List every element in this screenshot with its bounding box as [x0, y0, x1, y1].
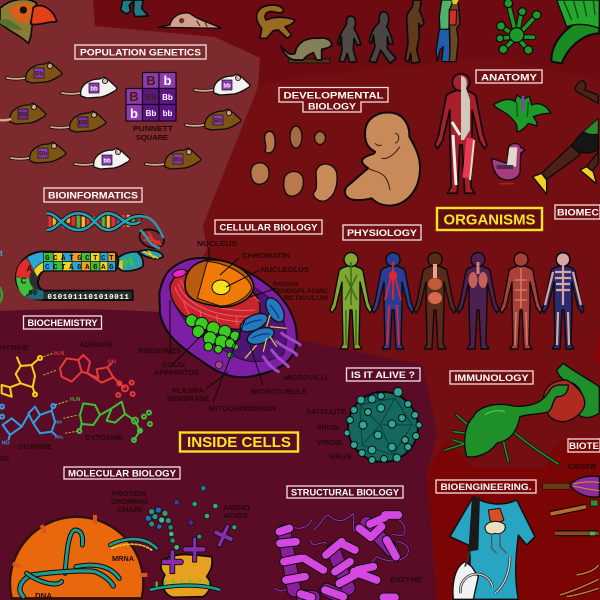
heading: developmental biology — [279, 88, 388, 112]
illustration: six physiology body systems — [330, 252, 584, 349]
illustration: animal cell cutaway — [159, 258, 300, 377]
chart: punnett square: BB — [145, 93, 157, 102]
base labels: ON — [0, 456, 9, 463]
label: enzyme: ENZYME — [390, 577, 422, 584]
chart: punnett square: Bb — [162, 93, 173, 102]
mouse brown Bb — [7, 62, 62, 83]
nucleus — [185, 260, 254, 307]
cell labels and leaders: MEMBRANE — [167, 396, 209, 403]
molecular biology labels: PROTEIN — [112, 491, 146, 498]
microvilli — [263, 333, 300, 372]
cell labels and leaders: PLASMA — [172, 388, 204, 395]
chart: punnett square — [126, 72, 176, 121]
icon: finch head — [0, 0, 57, 43]
heading: structural biology: STRUCTURAL BIOLOGY — [291, 488, 399, 498]
mouse brown BB second — [51, 111, 106, 132]
illustration: DNA helix unravelling to sequence and binary: A — [27, 265, 33, 274]
text fragment: left edge teal letter: t — [0, 249, 3, 258]
golgi apparatus — [186, 315, 240, 353]
heading: anatomy: ANATOMY — [481, 72, 537, 82]
cell labels and leaders: GOLGI — [162, 362, 185, 369]
illustrations: embryo stages — [251, 113, 420, 206]
cell labels and leaders: CHROMATIN — [242, 253, 290, 260]
label: crispr: CRISPR — [568, 464, 596, 471]
molecular biology labels — [111, 491, 251, 520]
nucleus labels: DNA — [35, 593, 52, 600]
mouse white bb: bb — [90, 86, 98, 92]
illustration: DNA helix unravelling to sequence and binary: C — [21, 276, 27, 285]
body: lymphatic system — [330, 252, 372, 349]
mitochondria — [238, 295, 288, 348]
heading: developmental biology: DEVELOPMENTAL — [284, 90, 384, 100]
chart: punnett square: bb — [163, 109, 172, 118]
mouse brown Bb third — [11, 142, 66, 163]
heading: immunology: IMMUNOLOGY — [454, 373, 528, 383]
panel: bioengineering region — [427, 438, 600, 600]
heading: biochemistry — [24, 316, 102, 329]
illustration: macrophage engulfing pathogen — [445, 363, 599, 464]
embryo stage 1 — [265, 131, 275, 153]
heading: population genetics — [75, 45, 206, 59]
rough endoplasmic reticulum — [170, 271, 260, 329]
chart: DNA base pair chemical structure: H₂N — [70, 397, 80, 403]
illustration: DNA helix unravelling to sequence and binary — [16, 213, 167, 302]
labels: non-living entities — [306, 409, 351, 461]
label: punnett square: PUNNETT — [133, 126, 174, 133]
hydrogen bonds — [43, 353, 78, 433]
label: punnett square: SQUARE — [136, 135, 168, 142]
body: digestive system — [414, 252, 456, 349]
molecular biology labels: ACIDS — [223, 513, 248, 520]
panel: organisms region — [160, 58, 600, 600]
heading: bioinformatics: BIOINFORMATICS — [48, 190, 138, 200]
embryo stage 2 — [290, 126, 302, 148]
mouse brown Bb fourth — [146, 148, 201, 169]
labels: non-living entities: VIROID — [317, 440, 342, 447]
heading: molecular biology: MOLECULAR BIOLOGY — [68, 468, 176, 478]
cell labels and leaders: MITOCHONDRION — [209, 406, 276, 413]
shirt — [450, 497, 535, 599]
chart: punnett square: b — [164, 73, 172, 88]
illustration: nucleus with DNA and mRNA — [10, 515, 157, 598]
mice with genotype tags — [0, 62, 250, 169]
chart: punnett square: b — [130, 106, 138, 121]
embryo stage 3 — [251, 163, 269, 184]
labels: non-living entities: PRION — [317, 425, 339, 432]
cell labels and leaders: RETICULUM — [284, 296, 328, 302]
panel: edge of neighbouring red region — [593, 330, 600, 365]
labels: non-living entities: SATELLITE — [306, 409, 346, 416]
icon: left edge green arcs — [0, 287, 2, 303]
icon: modern humans — [436, 0, 460, 62]
mouse brown Bb fourth: Bb — [174, 158, 182, 164]
illustration: virus — [344, 388, 422, 464]
chart: DNA base pair chemical structure: OH — [107, 359, 116, 365]
mouse white bb second: bb — [103, 158, 111, 164]
cell labels and leaders: NUCLEOLUS — [261, 267, 309, 274]
icon: dinosaur feet — [121, 0, 148, 17]
heading: biochemistry: BIOCHEMISTRY — [28, 318, 98, 328]
label: punnett square — [133, 126, 174, 142]
ribosome — [161, 555, 212, 597]
cell labels and leaders — [138, 241, 330, 413]
heading: organisms: ORGANISMS — [444, 212, 536, 228]
icon: hominid 2 — [369, 12, 396, 63]
mouse white bb third: bb — [223, 84, 231, 90]
transfer RNAs — [161, 524, 233, 574]
base labels: CYTOSINE — [85, 435, 123, 442]
illustration: total artificial heart on patient — [450, 497, 535, 599]
labels: non-living entities: VIRUS — [329, 454, 351, 461]
panel: inside cells region — [0, 309, 437, 600]
chart: punnett square: B — [146, 73, 156, 88]
illustration: ribosome translating protein — [145, 486, 237, 597]
heading: population genetics: POPULATION GENETICS — [80, 48, 201, 58]
chart: punnett square: B — [129, 89, 139, 104]
panel: evolution region at top — [93, 0, 600, 87]
mouse brown Bb: Bb — [35, 72, 43, 78]
heading: inside cells: INSIDE CELLS — [187, 434, 291, 451]
heading: physiology — [343, 225, 421, 240]
illustration: DNA helix unravelling to sequence and binary: 00 — [28, 290, 37, 298]
cell labels and leaders: APPARATUS — [154, 370, 199, 377]
strands lower — [560, 565, 599, 597]
molecule: thymine — [2, 356, 42, 397]
icon: monkey — [257, 5, 295, 38]
heading: biotechnology (cut off): BIOTE — [569, 441, 599, 451]
illustration: flower anatomy — [493, 95, 551, 132]
icon: large carnivorous plant — [552, 0, 599, 63]
body: muscular system — [500, 252, 542, 349]
icon: fossil skull — [158, 13, 222, 28]
base labels: HYMINE — [0, 345, 29, 352]
mouse brown Bb fifth — [186, 109, 241, 130]
chart: DNA base pair chemical structure: NH — [55, 419, 62, 424]
artificial heart — [488, 508, 504, 525]
chart: DNA base pair chemical structure — [0, 351, 152, 446]
molecule: adenine — [60, 355, 135, 397]
body: respiratory system — [457, 252, 499, 349]
cell labels and leaders: MICROTUBULE — [251, 389, 307, 396]
mouse white bb third — [195, 74, 250, 95]
icon: venus flytrap — [496, 0, 541, 54]
molecular biology labels: AMINO — [223, 505, 251, 512]
cas9 — [570, 476, 599, 497]
icon: hominid 3 — [405, 0, 424, 63]
cell labels and leaders: MICROVILLI — [284, 375, 327, 382]
chart: DNA base pair chemical structure: HO — [2, 440, 10, 446]
mouse brown Bb third: Bb — [39, 152, 47, 158]
heading: physiology: PHYSIOLOGY — [347, 228, 417, 238]
mouse brown BB second: BB — [79, 120, 88, 126]
nucleus labels: MRNA — [112, 556, 134, 563]
heading: is it alive — [346, 368, 420, 381]
heading: immunology — [450, 371, 533, 384]
heading: anatomy — [476, 70, 542, 83]
illustration: enzyme protein ribbon — [275, 513, 408, 597]
illustration: sprinter biomechanics — [533, 81, 598, 194]
base labels — [0, 342, 123, 463]
strap — [468, 497, 480, 552]
base labels: GUANINE — [18, 444, 52, 451]
chart: punnett square: Bb — [146, 109, 156, 118]
cell labels and leaders: RIBOSOMES — [138, 348, 181, 355]
nucleolus — [212, 280, 230, 295]
mouse white bb second — [75, 148, 130, 169]
icon: primate on branch — [281, 38, 332, 63]
heading: biotechnology (cut off) — [568, 439, 600, 452]
illustration: DNA helix unravelling to sequence and binary: CCTAGAGAG — [45, 264, 114, 272]
embryo stage 4 — [284, 171, 303, 196]
molecular biology labels: CHAIN — [117, 507, 142, 514]
base labels: ADENINE — [79, 342, 113, 349]
illustration: CRISPR tools — [543, 476, 599, 597]
illustration: human anatomy — [435, 74, 487, 193]
heading: bioengineering: BIOENGINEERING. — [440, 482, 532, 492]
vesicles — [215, 361, 223, 369]
heading: bioinformatics — [44, 188, 142, 202]
cell labels and leaders: ENDOPLASMIC — [277, 289, 330, 295]
heading: is it alive: IS IT ALIVE ? — [351, 370, 415, 380]
chart: DNA base pair chemical structure: NH₂ — [55, 434, 64, 439]
vacuole — [172, 268, 187, 279]
illustration: bird anatomy — [492, 143, 525, 184]
mouse brown BB — [0, 103, 46, 124]
icon: hominid 1 — [337, 16, 361, 62]
illustration: DNA helix unravelling to sequence and binary: GCATGCTCT — [45, 255, 114, 263]
portable driver — [453, 562, 478, 599]
heading: biomechanics (cut off) — [555, 205, 600, 219]
foetus — [345, 113, 420, 206]
cell labels and leaders: NUCLEUS — [197, 241, 237, 248]
heading: developmental biology: BIOLOGY — [308, 102, 356, 112]
mouse white bb — [62, 77, 117, 98]
growing protein chain and free amino acids — [145, 486, 237, 550]
DNA strands — [551, 507, 586, 514]
molecule: guanine — [0, 404, 57, 440]
body: circulatory system — [372, 252, 414, 349]
mRNA strand — [150, 586, 220, 590]
heading: bioengineering — [436, 480, 536, 493]
illustration: DNA helix unravelling to sequence and binary: 0101011101010011 — [47, 294, 129, 302]
heading: biomechanics (cut off): BIOMEC — [557, 208, 600, 218]
molecular biology labels: GROWING — [111, 499, 149, 506]
chart: DNA base pair chemical structure: H₂N — [54, 351, 64, 357]
body: skeletal system — [542, 252, 584, 349]
embryo stage 5 seed — [314, 132, 326, 144]
molecule: cytosine — [77, 402, 152, 442]
nucleus labels — [35, 556, 134, 600]
mouse brown BB: BB — [19, 112, 28, 118]
heading: cellular biology: CELLULAR BIOLOGY — [220, 222, 318, 232]
cell labels and leaders: ROUGH — [273, 282, 298, 288]
heading: cellular biology — [215, 220, 322, 234]
embryo stage 6 — [314, 164, 337, 201]
mouse brown Bb fifth: Bb — [214, 118, 222, 124]
heading: organisms — [437, 208, 542, 230]
microtubules — [245, 315, 287, 358]
